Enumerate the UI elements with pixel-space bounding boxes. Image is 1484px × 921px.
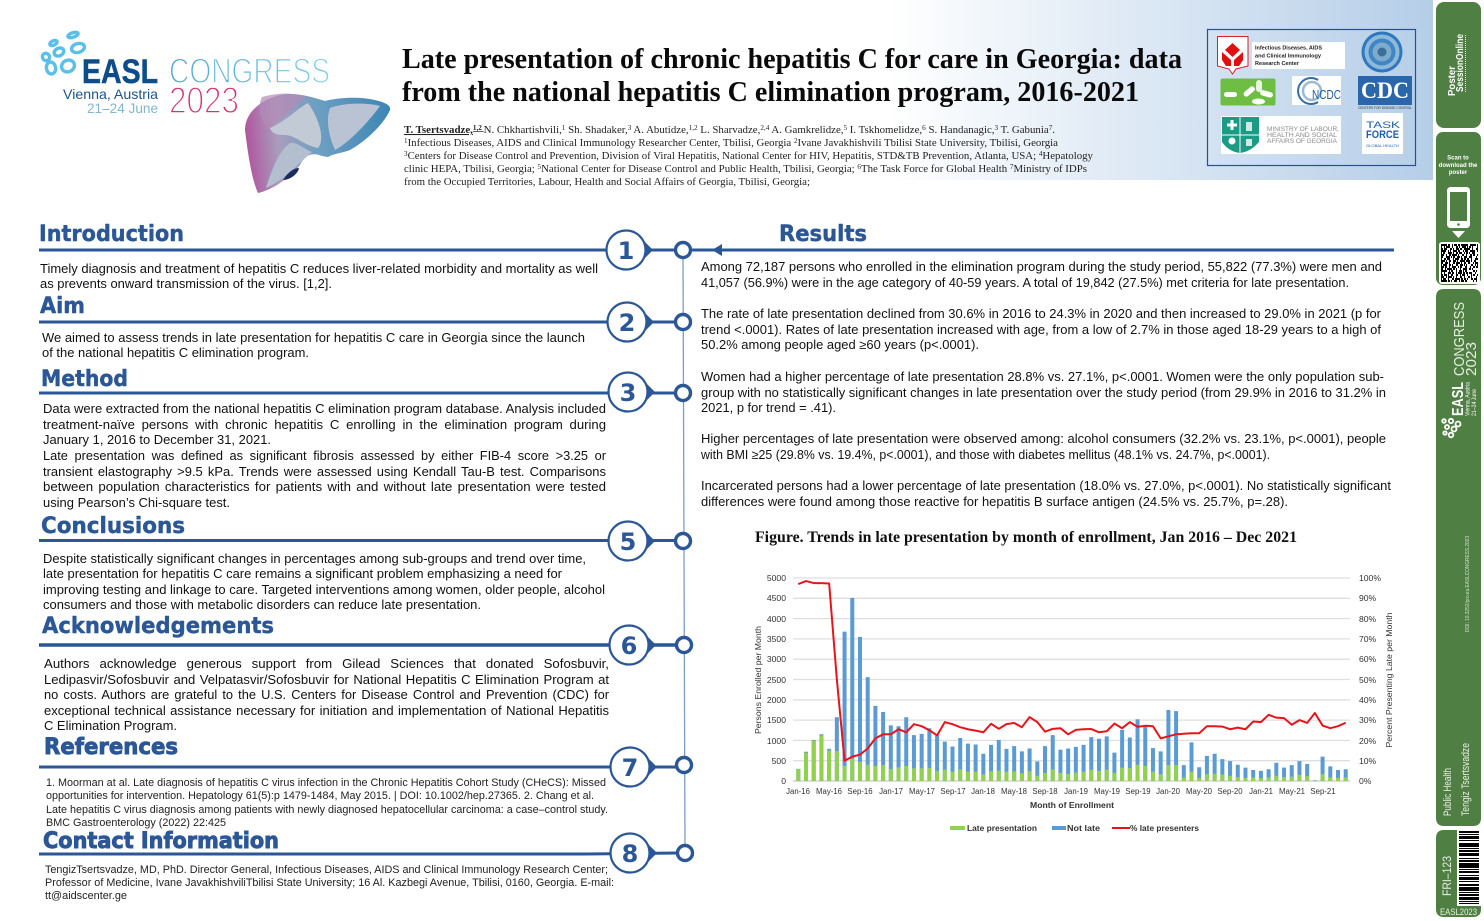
heading: Contact Information: Contact Information — [43, 829, 279, 854]
heading: figure title: Figure. Trends in late presentation by month of enrollment, Jan 2016 – Dec 2021 — [755, 529, 1297, 546]
authors and affiliations: . — [1052, 125, 1055, 136]
authors and affiliations: 1,2 — [473, 124, 484, 132]
authors and affiliations: 2,4 — [760, 124, 770, 132]
text: aim body — [42, 331, 585, 360]
left axis tick labels — [767, 573, 786, 786]
authors and affiliations: T. Gabunia — [998, 125, 1049, 136]
left axis tick labels: 1500 — [767, 715, 786, 725]
authors and affiliations: 3 — [995, 124, 999, 132]
authors and affiliations: Ivane Javakhishvili Tbilisi State University, Tbilisi, Georgia — [798, 138, 1058, 149]
marker 7 — [39, 748, 692, 786]
2023 wordmark: 2023 — [169, 80, 239, 121]
authors and affiliations: Hepatology — [1042, 151, 1094, 162]
text: references body: Late hepatitis C virus diagnosis among patients with newly diagnosed hepatocellular carcinoma: a case–control study. — [46, 804, 608, 816]
authors and affiliations: 7 — [1049, 124, 1053, 132]
barcode — [1457, 830, 1481, 906]
text: method body: Late presentation was defined as significant fibrosis assessed by either FIB-4 score >3.25 or — [43, 449, 606, 463]
text: contact body: TengizTsertsvadze, MD, PhD. Director General, Infectious Diseases, AIDS and Clinical Immunology Research Center; — [45, 864, 608, 876]
text: results paragraph 2 — [701, 307, 1382, 352]
right axis tick labels — [1359, 573, 1381, 786]
marker 5 — [39, 522, 690, 560]
text: results paragraph 3 — [701, 370, 1386, 415]
text: references body: opportunities for intervention. Hepatology 61(5):p 1479-1484, May 2015. | DOI: 10.1002/hep.27365. 2. Chang et al. — [46, 790, 594, 802]
x axis tick labels: Jan-19 — [1064, 787, 1088, 796]
text: category: Public Health — [1442, 768, 1454, 816]
text: method body: transient elastography >9.5 kPa. Trends were assessed using Kendall Tau-B test. Comparisons — [43, 465, 606, 479]
authors and affiliations: from the Occupied Territories, Labour, Health and Social Affairs of Georgia, Tbilisi, Georgia; — [404, 177, 810, 188]
x axis tick labels: Sep-19 — [1125, 787, 1151, 796]
text: results paragraph 4 — [700, 432, 1386, 462]
text: results paragraph 1 — [701, 260, 1382, 290]
timeline connector — [683, 250, 685, 853]
authors and affiliations: clinic HEPA, Tbilisi, Georgia; — [404, 164, 532, 175]
right axis tick labels: 30% — [1359, 715, 1377, 725]
text: contact body: Professor of Medicine, Ivane JavakhishviliTbilisi State University; 16 Al. Kazbegi Avenue, Tbilisi, 0160, Georgia. E-mail: — [45, 877, 614, 889]
illustration: liver — [245, 94, 390, 193]
authors and affiliations: L. Sharvadze, — [698, 125, 760, 136]
heading: Conclusions: Conclusions — [41, 514, 185, 539]
logo: Ministry of Labour, Health and Social Affairs: AFFAIRS OF GEORGIA — [1267, 139, 1337, 145]
text: results paragraph 3: Women had a higher percentage of late presentation 28.8% vs. 27.1%, p<.0001. Women were the only population sub- — [701, 370, 1384, 384]
x axis tick labels: May-19 — [1094, 787, 1120, 796]
x axis tick labels: Jan-17 — [879, 787, 903, 796]
authors and affiliations: Sh. Shadaker, — [565, 125, 628, 136]
text: introduction body: Timely diagnosis and treatment of hepatitis C reduces liver-related morbidity and mortality as well — [40, 262, 598, 276]
text: Poster Session Online: SessionOnline — [1455, 34, 1466, 92]
logo: Ministry of Labour, Health and Social Affairs — [1221, 116, 1341, 154]
authors and affiliations: Infectious Diseases, AIDS and Clinical Immunology Researcher Center, Tbilisi, Georgia — [408, 138, 794, 149]
authors and affiliations: N. Chkhartishvili, — [484, 125, 562, 136]
header background band — [0, 0, 1433, 180]
text: results paragraph 5: Incarcerated persons had a lower percentage of late presentation (18.0% vs. 27.0%, p<.0001). No statistically significant — [701, 479, 1392, 493]
x axis tick labels: Sep-20 — [1217, 787, 1243, 796]
left axis tick labels: 4500 — [767, 593, 786, 603]
left axis tick labels: 3000 — [767, 654, 786, 664]
marker 6 — [39, 626, 692, 664]
right axis tick labels: 80% — [1359, 614, 1377, 624]
location: Vienna, Austria — [63, 86, 158, 102]
text: results paragraph 5: differences were found among those reactive for hepatitis B surface antigen (24.5% vs. 25.7%, p=.28). — [701, 495, 1288, 509]
right axis tick labels: 100% — [1359, 573, 1381, 583]
left axis tick labels: 4000 — [767, 614, 786, 624]
right axis tick labels: 10% — [1359, 756, 1377, 766]
logo: Infectious Diseases centre shield — [1218, 36, 1248, 74]
text: results paragraph 1: Among 72,187 persons who enrolled in the elimination program during the study period, 55,822 (77.3%) were men and — [701, 260, 1382, 274]
logo: The Task Force for Global Health: FORCE — [1366, 129, 1399, 141]
authors and affiliations: Ministry of IDPs — [1014, 164, 1087, 175]
text: results paragraph 2: 50.2% among people aged ≥60 years (p<.0001). — [701, 338, 979, 352]
icon: EASL hexagon cluster — [41, 31, 86, 75]
text: conclusions body: consumers and those with metabolic disorders can reduce late presentation. — [43, 598, 481, 612]
panel: conclusions — [39, 514, 690, 612]
sidebar: Poster Session Online tab — [1436, 2, 1481, 128]
marker 3: 3 — [620, 379, 636, 407]
text: scan to download: poster — [1449, 170, 1468, 176]
text: aim body: We aimed to assess trends in late presentation for hepatitis C care in Georgia since the launch — [42, 331, 585, 345]
authors and affiliations: 4 — [1039, 150, 1043, 158]
text: Vienna, Austria: Vienna, Austria — [1464, 382, 1472, 416]
left axis tick labels: 2000 — [767, 695, 786, 705]
sidebar: congress tab — [1436, 289, 1481, 826]
partner logos panel — [1208, 30, 1416, 166]
authors and affiliations: T. Tsertsvadze, — [404, 124, 484, 136]
logo: NCDC: NCDC — [1312, 88, 1341, 102]
text: results paragraph 2: trend <.0001). Rates of late presentation increased with age, from a low of 2.7% in those aged 18-29 years to a high of — [701, 323, 1382, 337]
authors and affiliations: 3 — [404, 150, 408, 158]
logo: The Task Force for Global Health — [1362, 113, 1403, 154]
text: references body: 1. Moorman at al. Late diagnosis of hepatitis C virus infection in the Chronic Hepatitis Cohort Study (CHeCS): Missed — [46, 777, 606, 789]
text: results paragraph 5 — [701, 479, 1392, 509]
chart: trends in late presentation — [753, 573, 1394, 833]
text: presenter: Tengiz Tsertsvadze — [1460, 743, 1472, 816]
sidebar: poster number tab — [1436, 830, 1481, 917]
x axis tick labels: Jan-18 — [971, 787, 995, 796]
legend: % late presenters — [1130, 823, 1199, 833]
text: DOI: DOI: 10.3252/pro.eu.EASLCONGRESS.2023 — [1465, 536, 1471, 632]
legend: Late presentation — [967, 823, 1037, 833]
logo: The Task Force for Global Health: TASK — [1366, 120, 1401, 131]
text: acknowledgements body: C Elimination Program. — [44, 719, 177, 733]
text: results paragraph 3: 2021, p for trend = .41). — [701, 401, 836, 415]
text: method body — [43, 402, 606, 510]
marker 1 — [39, 230, 690, 270]
panel: results — [691, 222, 1394, 833]
right axis tick labels: 20% — [1359, 736, 1377, 746]
text: contact body — [45, 864, 614, 902]
text: acknowledgements body: exceptional technical assistance necessary for initiation and implementation of National Hepatitis — [44, 704, 609, 718]
heading: References: References — [44, 735, 178, 760]
right axis tick labels: 70% — [1359, 634, 1377, 644]
x axis title: Month of Enrollment — [1030, 800, 1114, 810]
authors and affiliations: 5 — [538, 163, 542, 171]
text: results paragraph 1: 41,057 (56.9%) were in the age category of 40-59 years. A total of 19,842 (27.5%) met criteria for late presentation. — [701, 276, 1349, 290]
legend: Not late — [1067, 823, 1100, 833]
title: Late presentation of chronic hepatitis C for care in Georgia: data — [402, 43, 1182, 75]
text: contact body: tt@aidscenter.ge — [45, 890, 127, 902]
x axis tick labels: May-20 — [1186, 787, 1213, 796]
marker 5: 5 — [620, 528, 636, 556]
x axis tick labels: Jan-20 — [1156, 787, 1181, 796]
icon: EASL hexagons — [1442, 419, 1460, 437]
x axis tick labels: May-18 — [1001, 787, 1027, 796]
text: results paragraph 4: Higher percentages of late presentation were observed among: alcohol consumers (32.2% vs. 23.1%, p<.0001), people — [701, 432, 1386, 446]
panel: method — [39, 367, 690, 510]
text: conclusions body: late presentation for hepatitis C care remains a significant problem emphasizing a need for — [43, 567, 562, 581]
text: acknowledgements body: Authors acknowledge generous support from Gilead Sciences that donated Sofosbuvir, — [44, 657, 609, 671]
right axis tick labels: 60% — [1359, 654, 1377, 664]
text: results paragraph 4: with BMI ≥25 (29.8% vs. 19.4%, p<.0001), and those with diabetes mellitus (48.1% vs. 24.7%, p<.0001). — [700, 448, 1270, 462]
logo: Ministry of Labour, Health and Social Affairs: MINISTRY OF LABOUR, — [1267, 127, 1339, 133]
panel: introduction — [39, 222, 690, 291]
sidebar: scan to download tab — [1436, 132, 1481, 285]
left axis tick labels: 5000 — [767, 573, 786, 583]
x axis tick labels — [786, 787, 1336, 796]
panel: references — [39, 735, 692, 829]
text: Poster Session Online — [1447, 34, 1466, 96]
title — [402, 43, 1182, 108]
text: conclusions body: Despite statistically significant changes in percentages among sub-groups and trend over time, — [43, 552, 586, 566]
left axis tick labels: 2500 — [767, 675, 786, 685]
line: percent late presenters — [798, 581, 1346, 761]
logo: research centre name: Research Center — [1255, 61, 1300, 67]
text: poster number: FRI–123 — [1440, 856, 1454, 896]
authors and affiliations: A. Gamkrelidze, — [769, 125, 844, 136]
panel: contact information — [39, 829, 692, 902]
logo: research centre name — [1252, 42, 1345, 69]
x axis tick labels: May-16 — [816, 787, 842, 796]
text: introduction body — [40, 262, 598, 291]
text: conclusions body: improving testing and linkage to care. Targeted interventions among women, older people, alcohol — [43, 583, 605, 597]
logo: research centre name: and Clinical Immunology — [1255, 54, 1321, 60]
x axis tick labels: Sep-21 — [1310, 787, 1336, 796]
left axis tick labels: 500 — [772, 756, 786, 766]
x axis tick labels: Jan-21 — [1249, 787, 1273, 796]
logo: NCDC — [1292, 76, 1341, 105]
x axis tick labels: Sep-18 — [1032, 787, 1058, 796]
text: EASL2023: EASL2023 — [1440, 907, 1477, 917]
authors and affiliations: 5 — [844, 124, 848, 132]
text: acknowledgements body: Ledipasvir/Sofosbuvir and Velpatasvir/Sofosbuvir for National Hepatitis C Elimination Program at — [44, 673, 610, 687]
authors and affiliations — [404, 124, 1094, 188]
heading: Results: Results — [779, 222, 867, 247]
dates: 21–24 June — [87, 100, 158, 116]
logo: university seal — [1362, 32, 1402, 72]
marker 6: 6 — [621, 632, 637, 660]
left axis tick labels: 3500 — [767, 634, 786, 644]
logo: EASL Congress 2023 — [41, 31, 330, 121]
arrow: results rule — [691, 244, 1394, 256]
icon: QR code — [1439, 242, 1480, 284]
text: scan to download: Scan to — [1447, 156, 1469, 162]
text: Poster Session Online: Poster — [1447, 66, 1458, 96]
bars: not late — [798, 598, 1346, 781]
logo: research centre name: Infectious Diseases, AIDS — [1255, 46, 1322, 52]
left axis tick labels: 1000 — [767, 736, 786, 746]
logo: CDC: CDC — [1361, 78, 1409, 103]
text: method body: January 1, 2016 to December 31, 2021. — [43, 433, 271, 447]
marker 8 — [39, 834, 692, 872]
text: introduction body: as prevents onward transmission of the virus. [1,2]. — [40, 277, 332, 291]
authors and affiliations: 6 — [857, 163, 861, 171]
title: from the national hepatitis C elimination program, 2016-2021 — [402, 76, 1139, 108]
x axis tick labels: May-17 — [909, 787, 935, 796]
authors and affiliations: A. Abutidze, — [631, 125, 689, 136]
x axis tick labels: Sep-16 — [847, 787, 873, 796]
heading: Aim: Aim — [40, 294, 85, 319]
authors and affiliations: I. Tskhomelidze, — [847, 125, 922, 136]
text: dates: 21–24 June — [1471, 389, 1478, 416]
text: conclusions body — [43, 552, 605, 612]
authors and affiliations: 1,2 — [689, 124, 698, 132]
authors and affiliations: 2 — [794, 137, 798, 145]
authors and affiliations: 3 — [628, 124, 632, 132]
logo: Ministry of Labour, Health and Social Affairs: HEALTH AND SOCIAL — [1267, 133, 1338, 139]
authors and affiliations: 1 — [562, 124, 566, 132]
text: references body: BMC Gastroenterology (2022) 22:425 — [46, 817, 226, 829]
text: references body — [46, 777, 608, 829]
text: CONGRESS: CONGRESS — [1451, 302, 1468, 376]
authors and affiliations: 6 — [922, 124, 926, 132]
authors and affiliations: S. Handanagic, — [926, 125, 995, 136]
text: acknowledgements body — [44, 657, 610, 733]
heading: Method: Method — [41, 367, 128, 392]
right axis tick labels: 90% — [1359, 593, 1377, 603]
marker 8: 8 — [622, 840, 638, 868]
panel: aim — [39, 294, 690, 360]
right axis title: Percent Presenting Late per Month — [1384, 612, 1394, 748]
logo: The Task Force for Global Health: GLOBAL HEALTH — [1366, 143, 1399, 148]
bars: late presentation — [798, 736, 1346, 781]
heading: Introduction: Introduction — [39, 222, 184, 247]
icon: smartphone — [1447, 187, 1470, 228]
CONGRESS wordmark: CONGRESS — [169, 52, 330, 91]
authors and affiliations: 1 — [404, 137, 408, 145]
arrow: down to QR code — [1452, 231, 1465, 238]
marker 2: 2 — [619, 309, 635, 337]
logo: HEPA clinic — [1220, 78, 1276, 106]
text: EASL: EASL — [1450, 382, 1467, 416]
x axis tick labels: Jan-16 — [786, 787, 810, 796]
text: acknowledgements body: no costs. Authors are grateful to the U.S. Centers for Disease Control and Prevention (CDC) for — [44, 688, 609, 702]
text: scan to download: download the — [1439, 163, 1478, 169]
authors and affiliations: Centers for Disease Control and Prevention, Division of Viral Hepatitis, National Center for HIV, Hepatitis, STD&TB Prevention, Atlanta, USA; — [408, 151, 1039, 162]
left axis tick labels: 0 — [781, 776, 786, 786]
text: 2023: 2023 — [1463, 342, 1480, 376]
panel: acknowledgements — [39, 614, 692, 733]
right axis tick labels: 40% — [1359, 695, 1377, 705]
right axis tick labels: 0% — [1359, 776, 1372, 786]
authors and affiliations: 7 — [1010, 163, 1014, 171]
EASL wordmark: EASL — [82, 53, 158, 91]
legend — [950, 823, 1199, 833]
marker 2 — [39, 302, 690, 342]
text: method body: between population characteristics for patients with and without late presentation were tested — [43, 480, 606, 494]
text: results paragraph 2: The rate of late presentation declined from 30.6% in 2016 to 24.3% in 2020 and then increased to 29.0% in 2021 (p for — [701, 307, 1381, 321]
text: aim body: of the national hepatitis C elimination program. — [42, 346, 309, 360]
marker 7: 7 — [622, 754, 638, 782]
right axis tick labels: 50% — [1359, 675, 1377, 685]
text: scan to download — [1439, 156, 1478, 176]
logo: CDC: CENTERS FOR DISEASE CONTROL — [1358, 106, 1412, 110]
heading: Acknowledgements: Acknowledgements — [42, 614, 274, 639]
marker 1: 1 — [618, 237, 634, 265]
authors and affiliations: National Center for Disease Control and Public Health, Tbilisi, Georgia; — [541, 164, 857, 175]
x axis tick labels: May-21 — [1279, 787, 1305, 796]
x axis tick labels: Sep-17 — [940, 787, 966, 796]
left axis title: Persons Enrolled per Month — [753, 626, 763, 734]
text: results paragraph 3: group with no statistically significant changes in late presentation over the study period (from 29.9% in 2016 to 31.2% in — [701, 386, 1386, 400]
marker 3 — [39, 372, 690, 412]
logo: CDC — [1358, 76, 1412, 110]
text: method body: using Pearson’s Chi-square test. — [43, 496, 230, 510]
text: method body: Data were extracted from the national hepatitis C elimination program database. Analysis included — [43, 402, 606, 416]
text: method body: treatment-naïve persons with chronic hepatitis C enrolling in the elimination program during — [43, 418, 606, 432]
authors and affiliations: The Task Force for Global Health — [861, 164, 1010, 175]
